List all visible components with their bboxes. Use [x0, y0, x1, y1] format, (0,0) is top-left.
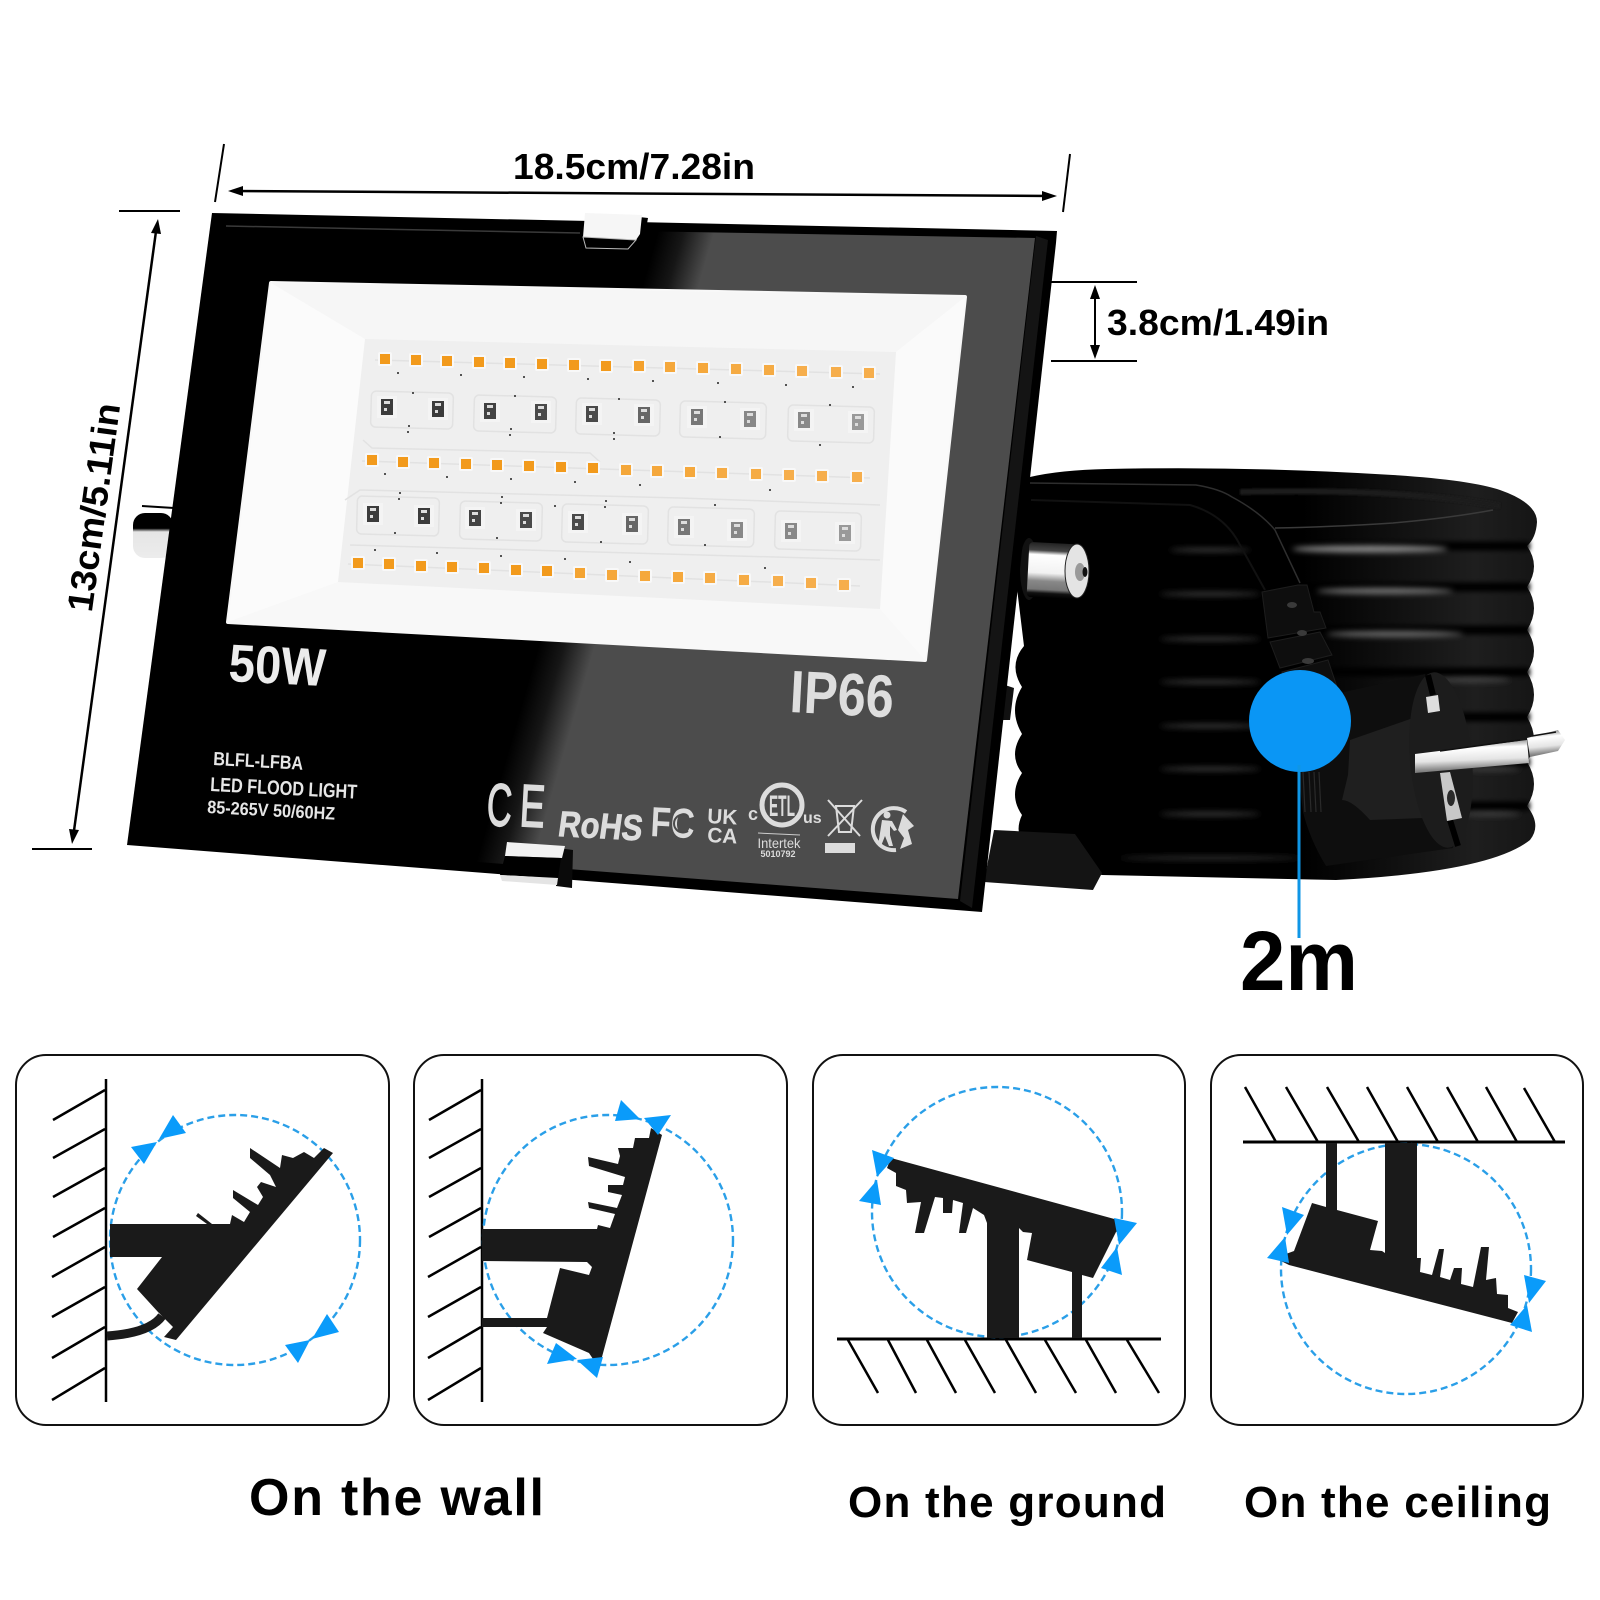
blue callout dot	[1249, 670, 1351, 772]
circuit traces	[345, 360, 880, 586]
panel: ceiling mount	[1211, 1055, 1583, 1425]
UKCA mark	[707, 805, 738, 849]
thickness label: 3.8cm/1.49in	[1107, 302, 1329, 343]
height label: 13cm/5.11in	[59, 400, 128, 614]
strain relief	[1262, 585, 1338, 700]
lamp side silhouette	[110, 1148, 333, 1340]
blue rotation arrows	[131, 1115, 339, 1363]
model label: BLFL-LFBA	[213, 749, 304, 775]
right chrome knob	[1020, 538, 1089, 600]
UKCA mark: UK	[707, 805, 738, 830]
UKCA mark: CA	[707, 824, 738, 849]
thickness dimension	[1045, 282, 1329, 361]
stand foot	[984, 830, 1102, 890]
panel frame	[414, 1055, 787, 1425]
caption: ground: On the ground	[848, 1478, 1166, 1527]
thickness arrow	[1090, 285, 1100, 359]
board solder dots	[374, 372, 854, 569]
panel frame	[1211, 1055, 1583, 1425]
wall hatching	[428, 1090, 481, 1400]
blue rotation arrows	[547, 1100, 671, 1378]
height dimension	[32, 211, 180, 849]
RoHS mark: RoHS	[556, 803, 645, 848]
thickness tick bottom	[1051, 360, 1137, 362]
IP rating label: IP66	[788, 658, 896, 730]
panel: ground mount	[813, 1055, 1185, 1425]
power cable	[107, 1316, 162, 1336]
coil inner ring edge	[1275, 510, 1493, 528]
ceiling line	[1243, 1140, 1565, 1144]
light reflector	[228, 283, 965, 660]
rear bracket	[1000, 685, 1014, 720]
coil body	[1015, 468, 1537, 880]
flood light	[127, 213, 1102, 912]
caption: ceiling: On the ceiling	[1244, 1478, 1551, 1527]
ETL mark: us	[803, 810, 822, 827]
callout line	[1298, 765, 1300, 938]
power cable coil	[1015, 468, 1537, 880]
wall line	[105, 1079, 107, 1402]
panel frame	[16, 1055, 389, 1425]
LED row 2	[366, 454, 863, 483]
Intertek label: 5010792	[760, 849, 796, 859]
ETL mark: ETL	[769, 790, 795, 823]
RGB chips row 1	[377, 396, 868, 433]
panel: wall mount 2	[414, 1055, 787, 1425]
LED row 3	[352, 557, 850, 591]
wall hatching	[52, 1090, 105, 1400]
WEEE bin mark	[826, 800, 862, 852]
height tick bottom	[32, 848, 92, 850]
cord inner edge	[1031, 500, 1265, 590]
panel frame	[813, 1055, 1185, 1425]
FCC mark: FC	[650, 798, 696, 847]
LED row 1	[379, 353, 875, 379]
blue rotation arrows	[859, 1150, 1137, 1275]
housing right strip	[960, 236, 1048, 908]
rotation circle	[872, 1087, 1122, 1337]
ground line	[837, 1338, 1161, 1340]
width label: 18.5cm/7.28in	[513, 146, 755, 187]
recycle person mark	[873, 808, 914, 850]
lamp glass face	[140, 224, 1035, 899]
metal pin	[1415, 730, 1565, 773]
plug ground clip	[1440, 772, 1462, 821]
bottom mounting clip	[500, 842, 573, 888]
cable length label: 2m	[1240, 914, 1358, 1008]
lamp housing	[127, 213, 1057, 912]
wattage label: 50W	[227, 634, 327, 698]
ceiling hatching	[1245, 1087, 1555, 1142]
width arrow	[228, 186, 1057, 201]
coil valleys	[1290, 546, 1530, 806]
CE mark: E	[518, 772, 547, 840]
product name label: LED FLOOD LIGHT	[210, 774, 358, 804]
plug inner recess	[1342, 718, 1423, 820]
certification marks	[485, 771, 914, 859]
plug grooves	[1303, 772, 1321, 812]
lamp side silhouette	[482, 1128, 662, 1368]
plug face slots	[1428, 675, 1458, 846]
width tick right	[1063, 154, 1070, 212]
plug socket pin	[1426, 695, 1440, 713]
rotation circle	[483, 1115, 733, 1365]
plug	[1262, 585, 1565, 866]
LED circuit board	[338, 339, 896, 609]
glass top line	[226, 226, 580, 233]
plug face	[1402, 670, 1480, 850]
voltage label: 85-265V 50/60HZ	[207, 797, 336, 824]
CE mark: C	[485, 771, 514, 839]
plug body	[1298, 674, 1462, 866]
cord to plug	[1030, 483, 1300, 583]
Intertek label: Intertek	[758, 835, 801, 851]
ETL mark	[748, 785, 822, 827]
caption: wall: On the wall	[249, 1469, 544, 1527]
top mounting clip	[583, 213, 648, 252]
lamp side silhouette	[887, 1158, 1129, 1338]
coil inner ring band	[1240, 491, 1500, 506]
thickness tick top	[1045, 281, 1137, 283]
lamp side silhouette	[1275, 1143, 1518, 1323]
rotation circle	[110, 1115, 360, 1365]
coil highlights	[1120, 546, 1520, 860]
wall line	[481, 1079, 483, 1402]
panel: wall mount 1	[16, 1055, 389, 1425]
rotation circle	[1281, 1144, 1531, 1394]
height tick top	[119, 210, 180, 212]
Intertek label	[758, 833, 801, 859]
width dimension	[215, 144, 1070, 212]
width tick left	[215, 144, 224, 202]
ETL mark: c	[748, 804, 758, 824]
height arrow	[69, 219, 161, 844]
blue rotation arrows	[1267, 1207, 1546, 1332]
left chrome knob	[133, 506, 174, 558]
ground hatching	[848, 1340, 1159, 1393]
RGB chips row 2	[363, 503, 855, 544]
